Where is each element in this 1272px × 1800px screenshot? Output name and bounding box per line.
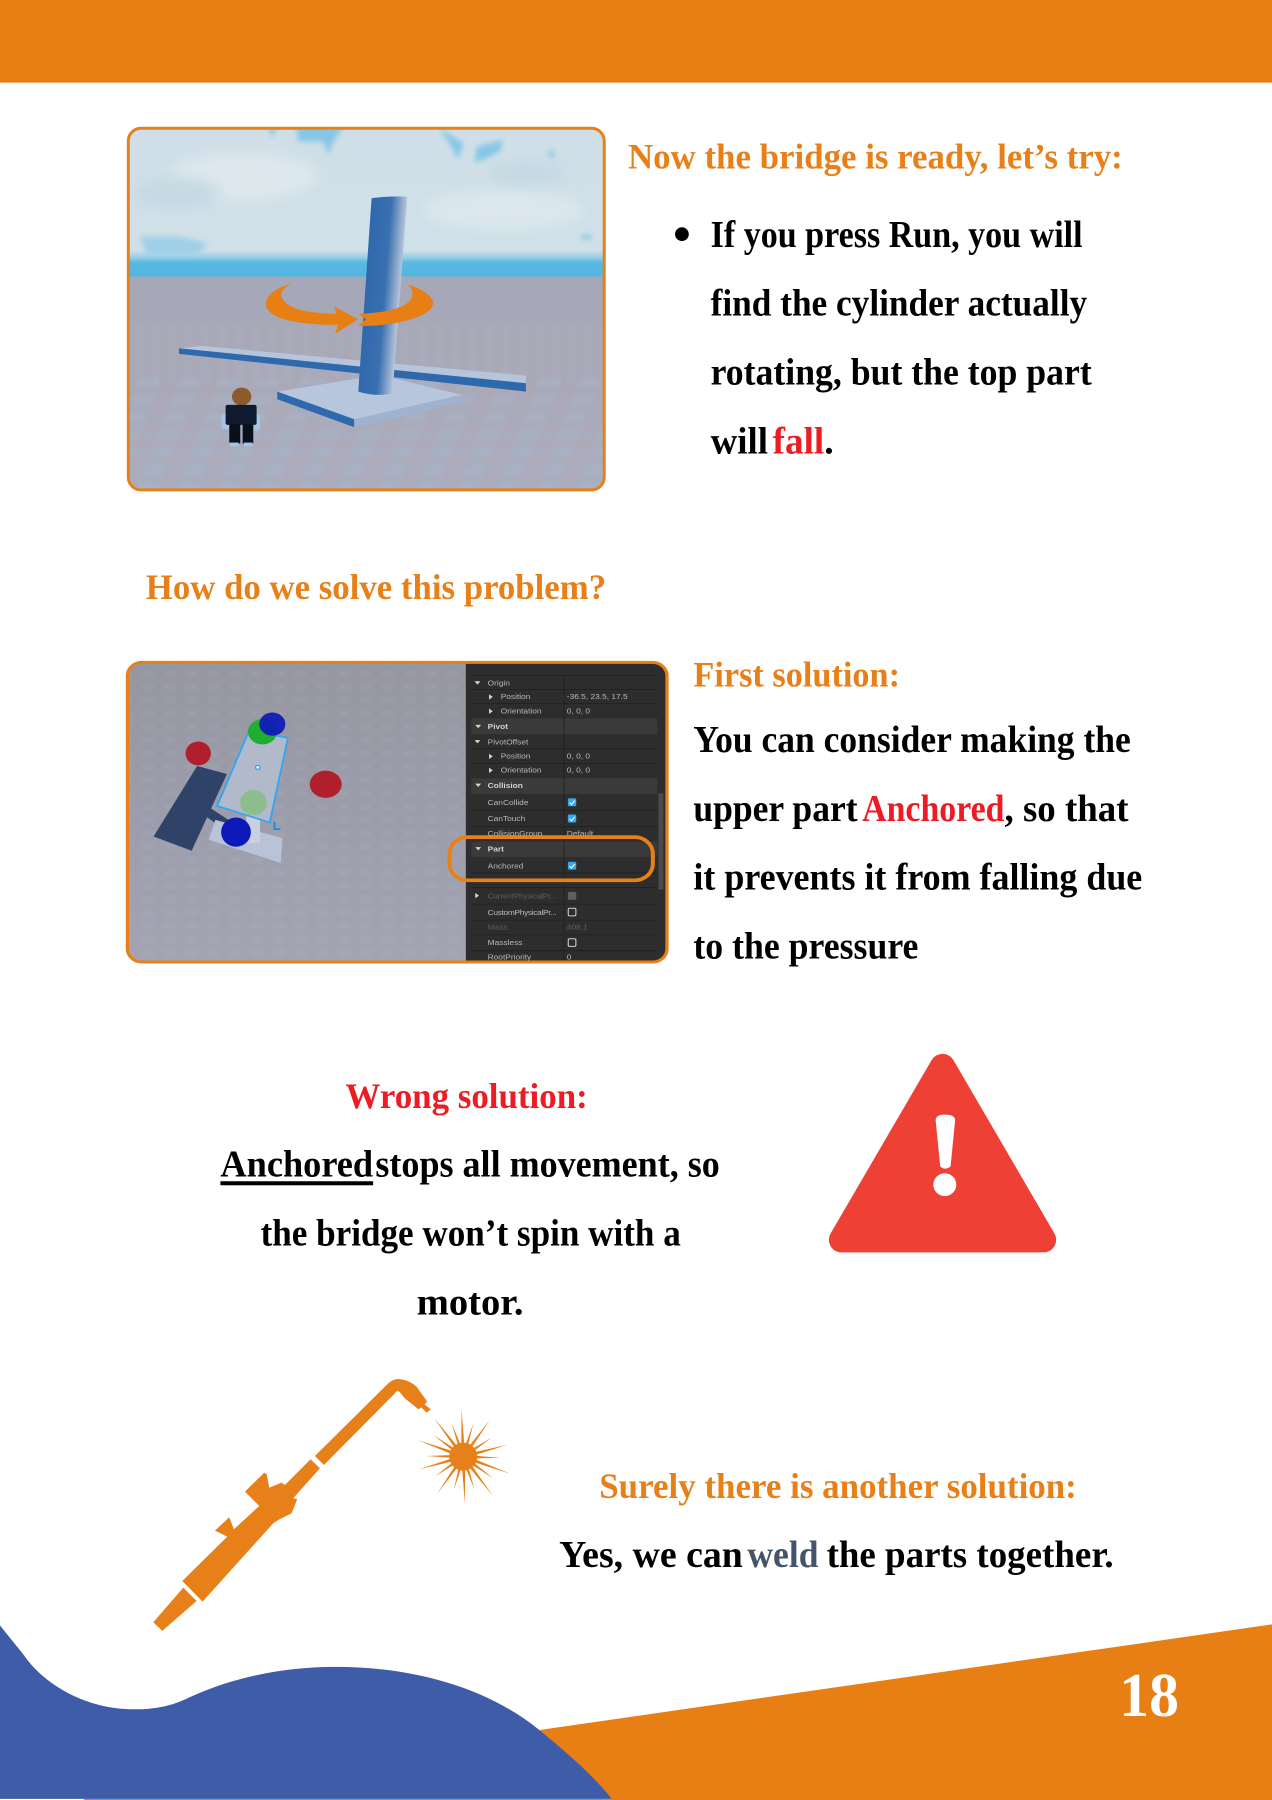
cylinder (358, 196, 407, 395)
property rows: 408.1 (567, 923, 588, 931)
line 2: Anchored (862, 788, 1005, 830)
footer: orange wedge (84, 1624, 1272, 1800)
character (222, 388, 260, 446)
coloured handles (186, 713, 342, 847)
property rows: Collision (488, 781, 523, 790)
line 4: will (711, 420, 768, 462)
panel: anchored properties screenshot (127, 662, 669, 962)
line 3: motor. (417, 1281, 523, 1323)
line 4: fall (773, 420, 824, 462)
icon: welding torch with spark (153, 1379, 510, 1631)
property rows: CurrentPhysicalPr... (488, 892, 557, 900)
properties panel (466, 662, 669, 962)
property rows: Orientation (501, 707, 542, 715)
heading: how do we solve this problem: How do we solve this problem? (146, 567, 606, 607)
text block: weld the parts (559, 1534, 1114, 1576)
property rows: RootPriority (488, 953, 531, 961)
property rows: Pivot (488, 722, 508, 731)
text block: weld the parts: Yes, we can (559, 1534, 743, 1576)
line 2 (693, 788, 1129, 830)
panel border (127, 662, 667, 962)
line 1: You can consider making the (693, 719, 1131, 761)
line 4: to the pressure (693, 926, 918, 968)
top orange banner (0, 0, 1272, 83)
line 2: the bridge won’t spin with a (261, 1213, 681, 1255)
text block: weld the parts: the parts together. (827, 1534, 1114, 1576)
text block: run result (675, 214, 1092, 462)
property rows: 0, 0, 0 (567, 766, 591, 775)
property rows: 0 (567, 953, 572, 961)
property rows: Default (567, 829, 594, 838)
heading: first solution: First solution: (693, 654, 900, 694)
icon: warning triangle (841, 1066, 1044, 1240)
bullet (675, 227, 689, 241)
long beam (179, 346, 526, 392)
rotation arrow (266, 284, 433, 334)
text block: first solution description (693, 719, 1142, 968)
sky (128, 128, 604, 277)
checkboxes (568, 798, 576, 946)
panel: rotating cylinder screenshot (128, 127, 604, 490)
line 2: , so that (1005, 788, 1129, 830)
viewport ground (127, 662, 469, 962)
property rows: Orientation (501, 766, 542, 775)
heading: now the bridge is ready: Now the bridge is ready, let’s try: (628, 137, 1123, 177)
spark (417, 1409, 510, 1504)
line 3: rotating, but the top part (711, 352, 1092, 394)
property rows: CanTouch (488, 814, 525, 823)
screenshot content (127, 662, 669, 962)
line 2: find the cylinder actually (711, 283, 1087, 325)
screenshot scene (128, 127, 604, 490)
property rows: Massless (488, 938, 522, 947)
property rows: PivotOffset (488, 738, 529, 746)
property rows: Position (501, 693, 530, 701)
highlight around anchored (450, 837, 653, 880)
text block: wrong solution description (220, 1144, 720, 1323)
page number: 18 (1119, 1662, 1179, 1730)
line 1 (220, 1144, 720, 1186)
property rows: CollisionGroup (488, 829, 543, 838)
torch tube and head (315, 1379, 431, 1465)
line 1: If you press Run, you will (711, 214, 1083, 256)
property rows: Position (501, 752, 530, 761)
ground (128, 277, 604, 490)
property rows: Origin (488, 679, 510, 687)
property rows: CanCollide (488, 798, 529, 807)
property rows: 0, 0, 0 (567, 752, 591, 761)
line 1: stops all movement, so (375, 1144, 720, 1186)
text block: weld the parts: weld (747, 1534, 819, 1576)
footer: blue wave (0, 1626, 612, 1799)
line 1: Anchored (220, 1144, 373, 1186)
property rows: Mass (488, 923, 508, 931)
expander arrows (475, 681, 493, 898)
property rows (488, 679, 628, 961)
property rows: Anchored (488, 862, 523, 870)
line 3: it prevents it from falling due (693, 857, 1142, 899)
torch body (182, 1459, 320, 1602)
heading: another solution: Surely there is another solution: (599, 1466, 1077, 1506)
property rows: -36.5, 23.5, 17.5 (567, 693, 628, 701)
clouds (133, 127, 593, 255)
line 4: . (824, 420, 834, 462)
line 4 (711, 420, 834, 462)
panel border (128, 128, 604, 490)
property rows: CustomPhysicalPr... (488, 908, 557, 917)
property rows: 0, 0, 0 (567, 707, 591, 715)
line 2: upper part (693, 788, 858, 830)
base plate (277, 375, 462, 427)
torch nozzle (153, 1588, 197, 1631)
heading: wrong solution: Wrong solution: (346, 1076, 588, 1116)
property rows: Part (488, 845, 504, 853)
bridge parts from above (154, 731, 288, 863)
